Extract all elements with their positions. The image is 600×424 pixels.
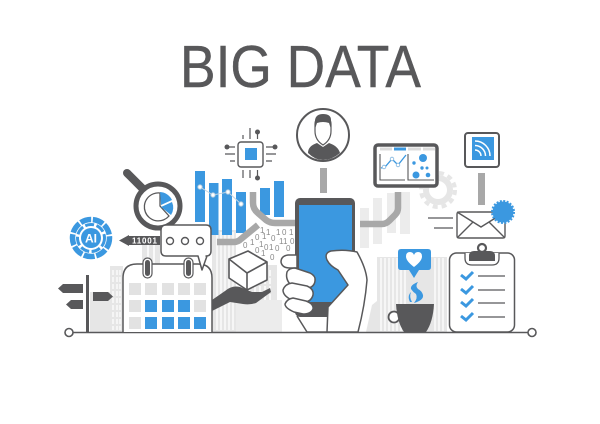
binary digits: 0	[255, 246, 260, 255]
connectors: left gray pipes	[217, 192, 295, 242]
binary digits: 1	[266, 228, 271, 237]
baseline	[65, 328, 536, 336]
binary digits: 1	[289, 228, 294, 237]
binary digits: 0	[255, 233, 260, 242]
icon: user avatar	[297, 109, 349, 161]
icon: smartphone	[295, 198, 355, 317]
icon: AI brain: AI	[85, 232, 97, 246]
icon: coffee cup	[388, 304, 434, 332]
binary digits: 0	[270, 253, 275, 262]
binary digits: 1	[283, 237, 288, 246]
binary digits	[243, 226, 295, 262]
icon: clipboard checklist	[450, 244, 514, 332]
bar chart	[195, 171, 284, 235]
background city skyline	[90, 192, 447, 332]
icon: signpost	[58, 275, 113, 332]
arrow: binary 11001: 11001	[132, 236, 158, 246]
icon: hand holding phone	[281, 250, 367, 332]
binary digits: 0	[290, 237, 295, 246]
icon: speech bubble	[161, 225, 211, 270]
binary digits: 0	[264, 243, 269, 252]
binary digits: 1	[269, 243, 274, 252]
icon: envelope with badge	[428, 201, 514, 238]
connector: wifi to envelope	[478, 173, 485, 205]
binary digits: 1	[261, 249, 266, 258]
icon: steam	[409, 282, 423, 303]
connector: avatar to phone	[320, 168, 327, 193]
binary digits: 1	[260, 226, 265, 235]
icon: calendar	[123, 258, 212, 332]
arrow: binary 11001	[119, 235, 160, 246]
binary digits: 0	[282, 228, 287, 237]
connector: phone to tablet	[360, 192, 398, 224]
icon: heart bubble	[398, 249, 431, 278]
binary digits: 1	[259, 240, 264, 249]
icon: hand holding cube	[212, 251, 271, 311]
binary digits: 0	[271, 234, 276, 243]
binary digits: 1	[276, 228, 281, 237]
icon: AI brain	[72, 220, 110, 256]
icon: chip	[224, 128, 278, 180]
binary digits: 0	[286, 244, 291, 253]
title: BIG DATA	[180, 34, 422, 100]
binary digits: 0	[275, 244, 280, 253]
icon: dashboard tablet	[375, 145, 437, 186]
binary digits: 0	[243, 241, 248, 250]
gear	[421, 173, 455, 207]
binary digits: 1	[279, 237, 284, 246]
binary digits: 1	[262, 232, 267, 241]
binary digits: 1	[250, 238, 255, 247]
icon: wifi tile	[465, 133, 499, 167]
icon: magnifier with pie chart	[127, 173, 180, 228]
